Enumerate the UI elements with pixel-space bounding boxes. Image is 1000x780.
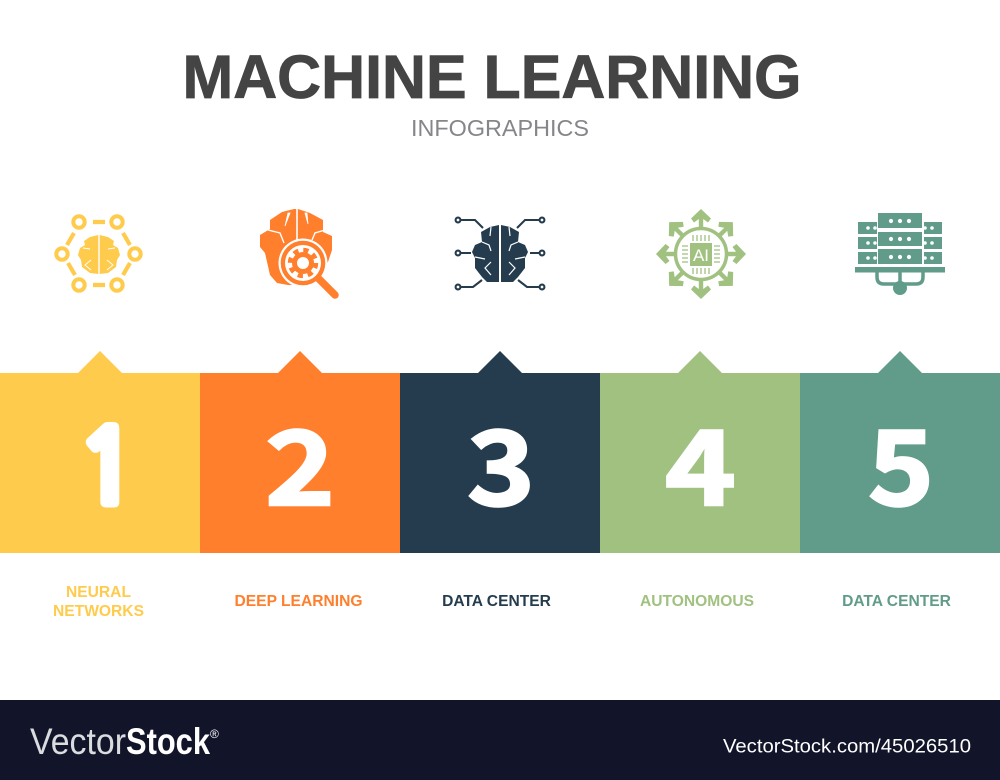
icon: server racks [855,213,945,295]
panel: step 5 [800,351,1000,553]
footer logo [30,721,219,762]
footer bar [0,700,1000,780]
footer image id: VectorStock.com/45026510 [723,736,971,758]
panel: step 2: 2 [265,386,335,535]
footer logo: Vector [30,721,126,762]
footer logo: Stock [126,721,210,762]
panel: step 2 [200,351,400,553]
panel: step 3: 3 [467,386,535,535]
label: neural networks: NEURAL [66,584,131,601]
panel: step 4 [600,351,800,553]
label: neural networks: NETWORKS [53,603,144,620]
icon: brain with magnifier and gear [260,208,335,295]
panel: step 1: 1 [77,418,138,519]
icon: brain circuit [456,218,544,289]
title: MACHINE LEARNING [182,43,802,111]
label: neural networks [53,584,144,620]
icon: AI chip with arrows: AI [693,246,709,265]
label: autonomous: AUTONOMOUS [640,593,754,610]
icon: neural network brain [56,216,141,291]
subtitle: INFOGRAPHICS [411,115,589,141]
panel: step 5: 5 [868,386,934,535]
footer logo: ® [210,727,219,741]
icon: AI chip with arrows [656,209,746,299]
panel: step 1 [0,351,200,553]
label: deep learning: DEEP LEARNING [235,593,362,610]
panel: step 3 [400,351,600,553]
label: data center: DATA CENTER [842,593,951,610]
label: data center: DATA CENTER [442,593,551,610]
panel: step 4: 4 [665,386,736,535]
